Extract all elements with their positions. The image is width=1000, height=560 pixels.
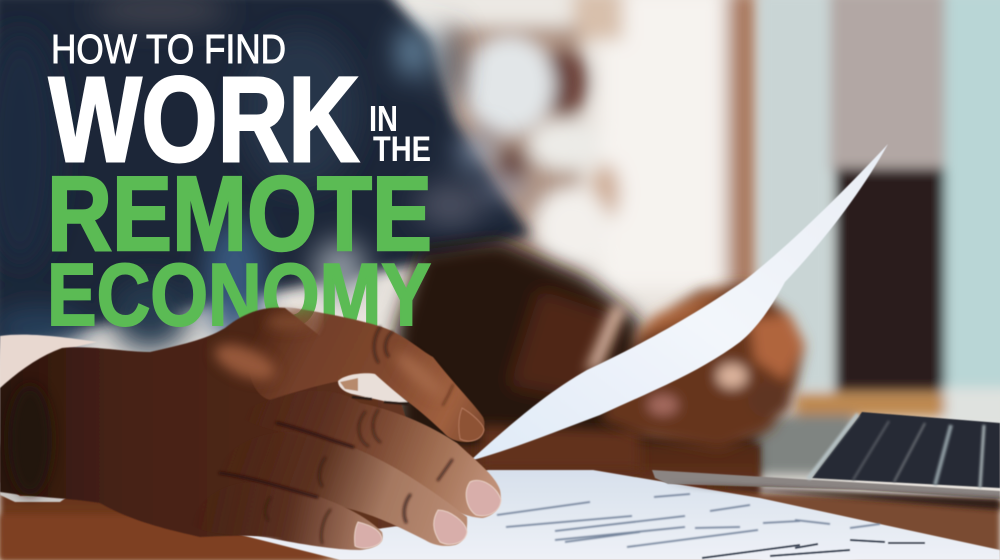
laptop base: [652, 470, 1000, 499]
foreground hand: [0, 307, 501, 550]
shirt cuff: [0, 335, 97, 388]
title line: remote: REMOTE: [47, 155, 432, 273]
finger: third finger: [215, 432, 467, 546]
jacket: [0, 0, 530, 345]
title line: in: IN: [369, 98, 398, 139]
jacket highlights: [0, 0, 523, 351]
finger: second finger: [235, 391, 501, 518]
dark torso: [395, 240, 650, 470]
raised sheet of paper: [470, 144, 888, 461]
hand shape: [0, 308, 440, 540]
laptop: [652, 412, 1000, 510]
title line: work: WORK: [49, 51, 359, 187]
wooden table: [0, 425, 1000, 560]
title line: how to find: HOW TO FIND: [51, 26, 286, 72]
title line: economy: ECONOMY: [47, 245, 431, 344]
laptop keyboard: [812, 412, 1000, 488]
finger creases: [220, 327, 453, 543]
knuckle highlights: [8, 315, 449, 495]
title: [47, 26, 432, 344]
lower cuff: [0, 482, 70, 502]
document on the table: [233, 470, 1000, 560]
title line: the: THE: [373, 130, 431, 169]
pen: [338, 373, 408, 404]
fingernails: [354, 408, 501, 548]
document text lines: [497, 494, 880, 547]
background hand holding paper: [585, 282, 805, 450]
finger: pointing finger top: [248, 307, 485, 442]
finger: little finger: [190, 482, 383, 550]
